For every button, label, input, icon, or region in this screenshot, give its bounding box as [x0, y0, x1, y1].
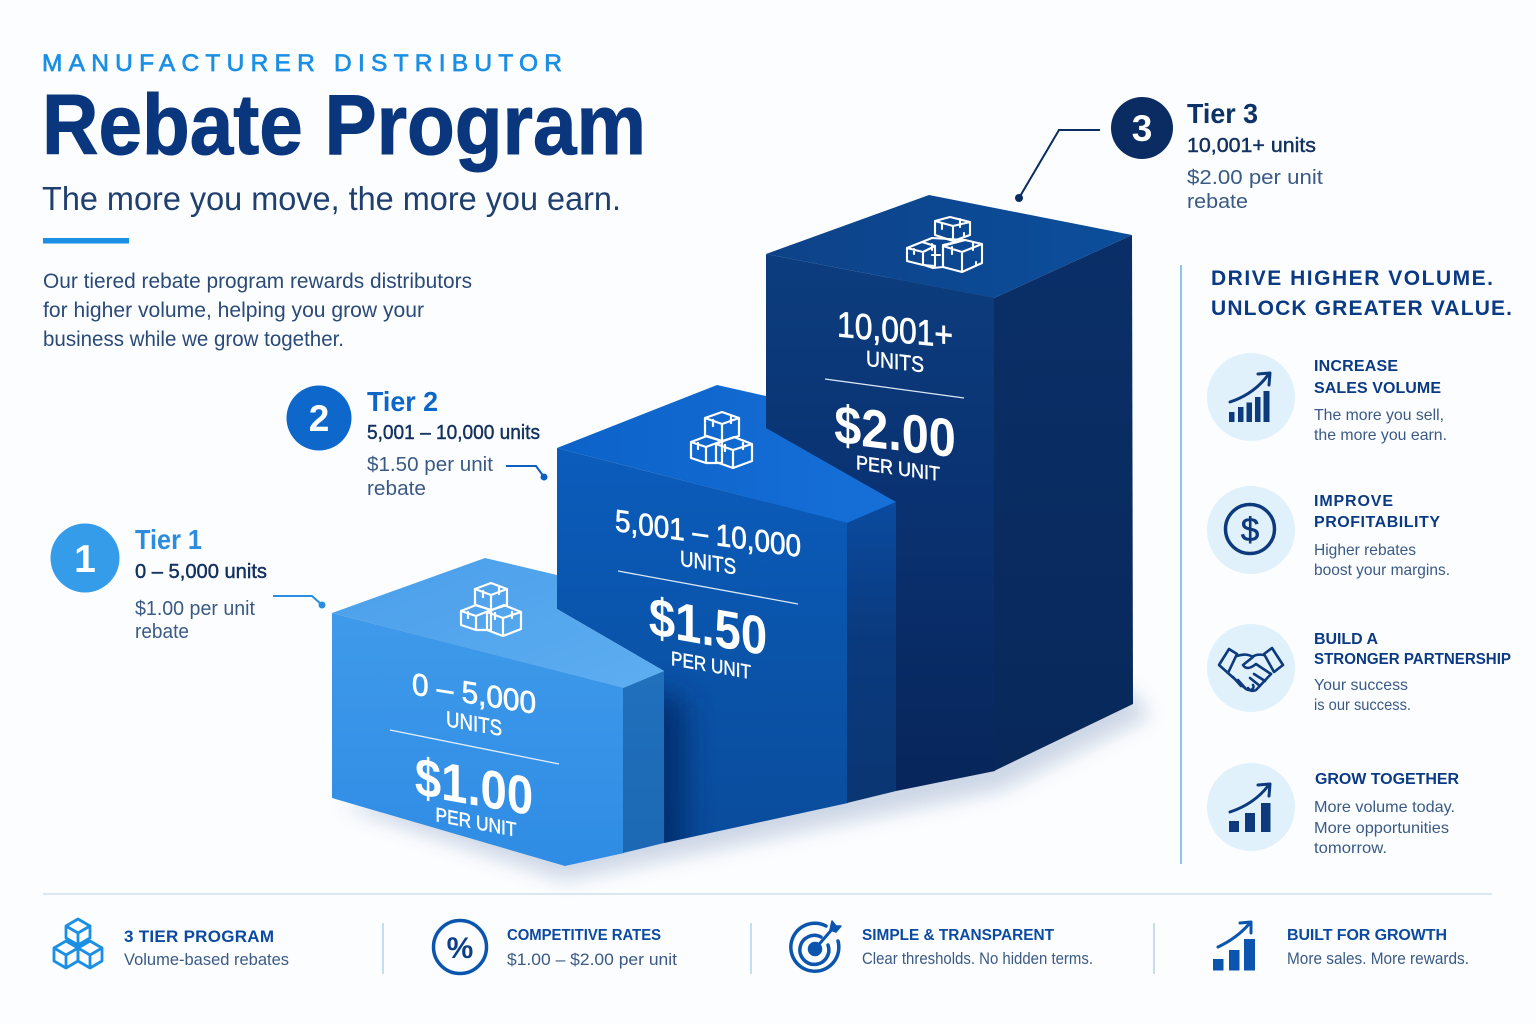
- benefit: improve profitability: boost your margins.: [1314, 562, 1450, 579]
- icon: percent circle: [434, 920, 486, 974]
- icon: percent circle: %: [447, 932, 473, 965]
- tier 1 callout: Tier 1: [135, 524, 202, 555]
- tier 3 text: [825, 305, 964, 486]
- benefit: grow together: tomorrow.: [1314, 840, 1387, 857]
- accent bar: [43, 238, 129, 244]
- intro paragraph: [43, 270, 472, 351]
- tier 3 callout: [1015, 97, 1323, 213]
- intro paragraph: business while we grow together.: [43, 328, 344, 351]
- tier 3 text: PER UNIT: [856, 452, 940, 486]
- benefit: improve profitability: [1207, 486, 1450, 579]
- connector 1: [273, 596, 322, 605]
- tier 2 text: [615, 504, 801, 683]
- benefit: grow together: More opportunities: [1314, 820, 1449, 837]
- tier 2 callout: rebate: [367, 478, 426, 500]
- intro paragraph: for higher volume, helping you grow your: [43, 299, 424, 322]
- feature: 3 tier program: Volume-based rebates: [124, 950, 289, 969]
- benefit: build a stronger partnership: is our success.: [1314, 697, 1411, 714]
- benefit: build a stronger partnership: Your success: [1314, 677, 1408, 694]
- benefit: improve profitability: Higher rebates: [1314, 542, 1416, 559]
- icon: boxes tier 2: [691, 412, 752, 468]
- connector 3: [1019, 130, 1100, 198]
- benefits heading: UNLOCK GREATER VALUE.: [1211, 297, 1512, 320]
- badge 2: [286, 386, 352, 450]
- tier 1 callout: [50, 524, 326, 643]
- subtitle: The more you move, the more you earn.: [42, 180, 621, 217]
- icon: dollar coin: $: [1241, 511, 1259, 548]
- feature: built for growth: More sales. More rewards.: [1287, 949, 1469, 968]
- badge 3: [1111, 97, 1173, 159]
- feature: built for growth: BUILT FOR GROWTH: [1287, 927, 1447, 944]
- benefit: increase sales volume: SALES VOLUME: [1314, 380, 1441, 397]
- benefit: increase sales volume: the more you earn.: [1314, 427, 1447, 444]
- feature: simple and transparent: Clear thresholds. No hidden terms.: [862, 949, 1093, 968]
- benefit: build a stronger partnership: [1207, 624, 1511, 714]
- icon: boxes tier 3: [907, 217, 982, 272]
- benefit: improve profitability: IMPROVE: [1314, 493, 1393, 510]
- tier 2 callout: 2: [309, 398, 329, 439]
- benefit: grow together: More volume today.: [1314, 799, 1455, 816]
- tier 3 text: $2.00: [834, 393, 956, 469]
- tier 1 text: PER UNIT: [436, 803, 517, 841]
- benefits heading: DRIVE HIGHER VOLUME.: [1211, 267, 1493, 290]
- tier 1 callout: rebate: [135, 621, 189, 643]
- tier 2 block: [557, 385, 896, 870]
- tier 3 block: [766, 195, 1133, 791]
- icon: growth bars: [1229, 784, 1270, 832]
- tier 2 text: $1.50: [649, 586, 767, 667]
- benefit: build a stronger partnership: STRONGER PARTNERSHIP: [1314, 651, 1511, 668]
- benefit: increase sales volume: [1207, 353, 1447, 444]
- benefit: grow together: [1207, 763, 1459, 857]
- benefit: increase sales volume: INCREASE: [1314, 358, 1398, 375]
- main title: Rebate Program: [42, 78, 646, 173]
- feature: competitive rates: $1.00 – $2.00 per unit: [507, 950, 677, 969]
- tier 1 callout: 0 – 5,000 units: [135, 560, 267, 583]
- tier 1 callout: 1: [74, 538, 96, 581]
- tier 1 text: UNITS: [446, 707, 502, 741]
- tier 2 callout: $1.50 per unit: [367, 454, 493, 476]
- benefits heading: [1211, 267, 1512, 320]
- tier 3 callout: Tier 3: [1187, 98, 1258, 129]
- tier 2 callout: Tier 2: [367, 386, 438, 417]
- tier 2 callout: [286, 386, 548, 500]
- tier 2 text: UNITS: [680, 546, 736, 580]
- feature: 3 tier program: 3 TIER PROGRAM: [124, 927, 274, 946]
- tier 3 callout: 3: [1132, 108, 1152, 149]
- tier 3 text: UNITS: [866, 347, 924, 378]
- bottom strip: [43, 894, 1492, 974]
- icon: rising bars: [1229, 373, 1270, 422]
- icon: stacked cubes: [54, 919, 102, 968]
- benefit: improve profitability: PROFITABILITY: [1314, 514, 1440, 531]
- feature: competitive rates: COMPETITIVE RATES: [507, 927, 661, 944]
- benefits panel: [1181, 265, 1512, 864]
- icon: boxes tier 1: [461, 583, 521, 636]
- feature: competitive rates: [434, 920, 677, 974]
- tier 3 callout: rebate: [1187, 191, 1248, 213]
- icon: dollar coin: [1226, 504, 1274, 554]
- feature: simple and transparent: SIMPLE & TRANSPARENT: [862, 927, 1054, 944]
- feature: 3 tier program: [54, 919, 289, 969]
- tier 3 callout: 10,001+ units: [1187, 134, 1316, 157]
- benefit: increase sales volume: The more you sell,: [1314, 407, 1444, 424]
- tier 2 callout: 5,001 – 10,000 units: [367, 421, 540, 444]
- eyebrow heading: MANUFACTURER DISTRIBUTOR: [42, 50, 562, 77]
- header block: [42, 50, 646, 244]
- connector 2: [506, 466, 544, 477]
- icon: target: [791, 921, 841, 971]
- lower shaded part of tier 2: [664, 681, 700, 843]
- feature: simple and transparent: [791, 921, 1093, 971]
- tier 3 callout: $2.00 per unit: [1187, 167, 1323, 189]
- tier 2 text: PER UNIT: [671, 647, 751, 683]
- icon: handshake: [1219, 648, 1283, 691]
- benefit: build a stronger partnership: BUILD A: [1314, 631, 1378, 648]
- tier 1 block: [332, 558, 664, 866]
- tier 2 text: 5,001 – 10,000: [615, 504, 801, 564]
- feature: built for growth: [1213, 922, 1469, 970]
- tier 3 text: 10,001+: [837, 305, 953, 356]
- intro paragraph: Our tiered rebate program rewards distributors: [43, 270, 472, 293]
- tier 1 text: $1.00: [415, 746, 533, 827]
- staircase shadow: [340, 690, 1150, 880]
- badge 1: [50, 524, 120, 592]
- benefit: grow together: GROW TOGETHER: [1315, 771, 1459, 788]
- tier 1 text: 0 – 5,000: [412, 667, 536, 721]
- icon: growth chart: [1213, 922, 1255, 970]
- tier 1 text: [390, 667, 559, 841]
- tier 1 callout: $1.00 per unit: [135, 598, 255, 620]
